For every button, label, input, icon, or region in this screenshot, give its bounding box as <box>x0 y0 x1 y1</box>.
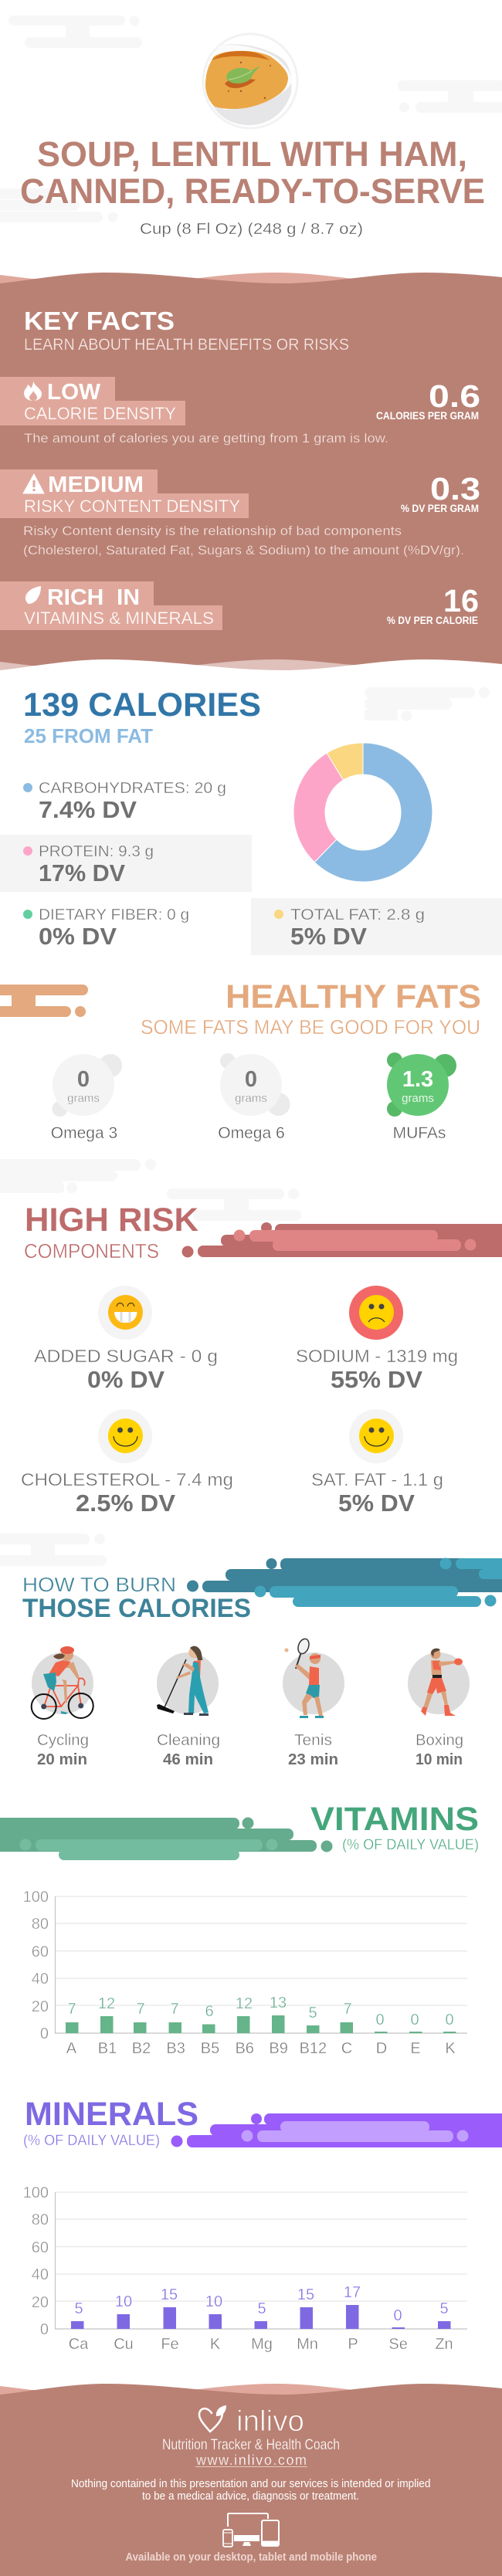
legend: total fat: 5% DV <box>290 923 367 950</box>
bar chart: vitamins <box>23 1889 467 2057</box>
component: saturated fat: 5% DV <box>338 1490 415 1517</box>
legend: protein: PROTEIN: 9.3 g <box>39 843 154 860</box>
title <box>20 134 485 211</box>
tag: low calorie density: LOW <box>47 380 101 405</box>
bar chart: vitamins: B2 <box>132 2040 151 2057</box>
legend: protein: 17% DV <box>39 859 125 886</box>
bar chart: vitamins: 13 <box>270 1995 287 2012</box>
legend: total fat: TOTAL FAT: 2.8 g <box>290 907 425 924</box>
tag: low calorie density <box>0 377 185 425</box>
bar chart: minerals: P <box>348 2336 358 2353</box>
legend: carbohydrates <box>23 780 226 823</box>
heading: vitamins: VITAMINS <box>310 1801 479 1838</box>
bar chart: vitamins: 0 <box>40 2025 49 2042</box>
bar chart: vitamins: 7 <box>136 2001 145 2018</box>
decoration: teal cloud <box>187 1558 502 1607</box>
stat: omega 6: Omega 6 <box>218 1124 285 1142</box>
panel: key facts <box>0 273 502 683</box>
logo: inlivo heart: inlivo <box>236 2405 304 2438</box>
component: sodium: SODIUM - 1319 mg <box>296 1346 458 1366</box>
bar chart: minerals: 40 <box>32 2266 49 2283</box>
food photo: bowl of lentil soup <box>203 34 297 128</box>
bar chart: vitamins: 7 <box>170 2001 179 2018</box>
heading: healthy fats: HEALTHY FATS <box>226 978 481 1015</box>
bar chart: vitamins: 80 <box>32 1916 49 1933</box>
label: cleaning <box>157 1732 220 1768</box>
stat: dv per calorie <box>387 583 479 626</box>
bar chart: vitamins: B9 <box>269 2040 288 2057</box>
bar chart: minerals: 15 <box>161 2286 178 2303</box>
component: sodium: 55% DV <box>331 1366 422 1393</box>
bar chart: minerals: K <box>210 2336 221 2353</box>
disclaimer: to be a medical advice, diagnosis or treatment. <box>142 2490 359 2503</box>
bar chart: minerals: 0 <box>40 2321 49 2338</box>
legend: carbohydrates: 7.4% DV <box>39 796 137 823</box>
label: cleaning: 46 min <box>163 1751 213 1768</box>
panel: minerals <box>23 2096 502 2353</box>
bar chart: minerals: Cu <box>114 2336 134 2353</box>
bar chart: vitamins: 60 <box>32 1944 49 1961</box>
panel: how to burn those calories <box>22 1558 502 1768</box>
label: tennis: Tenis <box>294 1732 332 1749</box>
decoration: tan cloud <box>0 985 88 1017</box>
bar chart: minerals: 15 <box>297 2286 314 2303</box>
bar chart: minerals: 17 <box>344 2284 361 2301</box>
component: cholesterol: CHOLESTEROL - 7.4 mg <box>21 1469 233 1490</box>
bar chart: minerals <box>23 2185 467 2353</box>
bar chart: minerals: 100 <box>23 2185 49 2201</box>
bar chart: minerals: Zn <box>435 2336 453 2353</box>
activity: cycling <box>32 1646 93 1719</box>
component: cholesterol <box>21 1409 233 1517</box>
text: calorie explanation: The amount of calories you are getting from 1 gram is low. <box>24 432 388 446</box>
bar chart: minerals: Fe <box>161 2336 179 2353</box>
label: cycling: Cycling <box>37 1732 89 1749</box>
component: cholesterol: 2.5% DV <box>76 1490 175 1517</box>
bar chart: vitamins: 6 <box>205 2003 214 2020</box>
bar chart: vitamins: B6 <box>235 2040 254 2057</box>
subheading: daily value: (% OF DAILY VALUE) <box>23 2133 160 2149</box>
panel: high risk components <box>21 1202 502 1517</box>
bar chart: minerals: 5 <box>257 2300 266 2317</box>
bar chart: minerals: Mg <box>251 2336 273 2353</box>
bar chart: minerals: 60 <box>32 2239 49 2256</box>
bar chart: vitamins: K <box>445 2040 456 2057</box>
bar chart: minerals: 0 <box>393 2307 402 2324</box>
text: risky density explanation: Risky Content density is the relationship of bad components <box>23 524 402 538</box>
bar chart: vitamins: 12 <box>236 1995 253 2012</box>
bar chart: minerals: Se <box>388 2336 408 2353</box>
bar chart: vitamins: 0 <box>445 2012 454 2029</box>
legend: dietary fiber: 0% DV <box>39 923 117 950</box>
bar chart: vitamins: 40 <box>32 1971 49 1988</box>
stat: risky density <box>401 471 480 514</box>
tag: medium risky content density: RISKY CONTENT DENSITY <box>24 497 240 516</box>
title: CANNED, READY-TO-SERVE <box>20 171 485 211</box>
decoration: purple cloud <box>171 2113 502 2147</box>
heading: high risk: HIGH RISK <box>25 1202 198 1239</box>
stat: risky density: % DV PER GRAM <box>401 503 479 514</box>
label: cycling <box>37 1732 89 1768</box>
bar chart: vitamins: 7 <box>67 2001 76 2018</box>
bar chart: minerals: Mn <box>297 2336 318 2353</box>
bar chart: vitamins: 7 <box>343 2001 352 2018</box>
donut chart <box>293 743 432 882</box>
stat: mufas: 1.3 <box>402 1067 433 1092</box>
stat: omega 6: grams <box>235 1092 267 1105</box>
icon: devices <box>223 2513 279 2547</box>
activity: boxing <box>408 1649 470 1716</box>
stat: omega 6: 0 <box>245 1067 257 1092</box>
label: tennis: 23 min <box>288 1751 338 1768</box>
label: tennis <box>288 1732 338 1768</box>
bar chart: vitamins: D <box>376 2040 387 2057</box>
bar chart: vitamins: A <box>66 2040 77 2057</box>
stat: mufas: grams <box>402 1092 434 1105</box>
subheading: LEARN ABOUT HEALTH BENEFITS OR RISKS <box>24 336 349 354</box>
heading: minerals: MINERALS <box>25 2096 198 2133</box>
stat: dv per calorie: 16 <box>443 583 479 619</box>
stat: omega 3 <box>51 1054 122 1142</box>
tag: low calorie density: CALORIE DENSITY <box>24 404 176 423</box>
legend: dietary fiber: DIETARY FIBER: 0 g <box>39 907 189 924</box>
bar chart: vitamins: 0 <box>375 2012 385 2029</box>
stat: calorie density: CALORIES PER GRAM <box>376 410 479 422</box>
bar chart: vitamins: 12 <box>98 1995 115 2012</box>
tag: rich in vitamins and minerals: RICH IN <box>47 585 140 610</box>
serving size: Cup (8 Fl Oz) (248 g / 8.7 oz) <box>140 221 363 238</box>
activity: tennis <box>283 1637 344 1718</box>
logo: inlivo heart <box>199 2405 304 2438</box>
disclaimer: Nothing contained in this presentation and our services is intended or implied <box>71 2477 431 2490</box>
component: added sugar: ADDED SUGAR - 0 g <box>34 1346 218 1366</box>
component: sodium <box>296 1286 458 1393</box>
stat: risky density: 0.3 <box>430 471 480 507</box>
bar chart: minerals: 20 <box>32 2294 49 2311</box>
heading: key facts: KEY FACTS <box>24 307 175 335</box>
stat: dv per calorie: % DV PER CALORIE <box>387 615 478 626</box>
subheading: daily value: (% OF DAILY VALUE) <box>342 1837 479 1853</box>
label: cleaning: Cleaning <box>157 1732 220 1749</box>
bar chart: vitamins: B3 <box>166 2040 185 2057</box>
bar chart: vitamins: 0 <box>410 2012 419 2029</box>
subheading: from fat: 25 FROM FAT <box>24 724 153 747</box>
bar chart: minerals: 5 <box>439 2300 449 2317</box>
component: added sugar <box>34 1286 218 1393</box>
bar chart: vitamins: B12 <box>300 2040 327 2057</box>
bar chart: vitamins: 20 <box>32 1998 49 2015</box>
legend: protein <box>23 843 154 886</box>
component: saturated fat: SAT. FAT - 1.1 g <box>311 1469 443 1490</box>
bar chart: vitamins: 100 <box>23 1889 49 1906</box>
label: cycling: 20 min <box>37 1751 87 1768</box>
legend: total fat <box>274 907 425 950</box>
disclaimer <box>71 2477 431 2503</box>
stat: omega 3: grams <box>67 1092 100 1105</box>
bar chart: vitamins: B1 <box>98 2040 117 2057</box>
bar chart: vitamins: 5 <box>308 2005 317 2022</box>
title: SOUP, LENTIL WITH HAM, <box>37 134 467 174</box>
bar chart: minerals: 80 <box>32 2212 49 2229</box>
legend: dietary fiber <box>23 907 189 950</box>
panel: calories <box>0 686 502 955</box>
decoration: green cloud <box>0 1818 332 1860</box>
bar chart: vitamins: B5 <box>201 2040 219 2057</box>
stat: omega 3: Omega 3 <box>51 1124 117 1142</box>
panel: vitamins <box>0 1801 479 2057</box>
component: added sugar: 0% DV <box>87 1366 165 1393</box>
tag: rich in vitamins and minerals: VITAMINS & MINERALS <box>24 608 214 628</box>
availability note: Available on your desktop, tablet and mobile phone <box>125 2551 377 2564</box>
label: boxing: 10 min <box>416 1751 463 1768</box>
bar chart: minerals: 10 <box>115 2293 132 2310</box>
heading: calories: 139 CALORIES <box>23 686 261 724</box>
stat: mufas <box>387 1052 456 1142</box>
decoration: red cloud <box>182 1222 502 1257</box>
stat: mufas: MUFAs <box>393 1124 446 1142</box>
label: boxing <box>416 1732 463 1768</box>
stat: omega 6 <box>218 1053 290 1142</box>
panel: healthy fats <box>0 978 481 1142</box>
legend: carbohydrates: CARBOHYDRATES: 20 g <box>39 780 226 797</box>
label: boxing: Boxing <box>416 1732 463 1749</box>
subheading: fats: SOME FATS MAY BE GOOD FOR YOU <box>141 1015 480 1039</box>
stat: calorie density <box>376 378 480 422</box>
component: saturated fat <box>311 1409 443 1517</box>
bar chart: vitamins: E <box>410 2040 421 2057</box>
heading: those calories: THOSE CALORIES <box>22 1594 251 1623</box>
bar chart: vitamins: C <box>341 2040 352 2057</box>
tag: rich in vitamins and minerals <box>0 581 222 630</box>
panel: footer <box>0 2384 502 2576</box>
tag: medium risky content density <box>0 469 249 518</box>
activity: cleaning <box>157 1646 219 1716</box>
heading: how to burn: HOW TO BURN <box>22 1573 176 1596</box>
bar chart: minerals: Ca <box>69 2336 89 2353</box>
bar chart: minerals: 5 <box>74 2300 83 2317</box>
bar chart: minerals: 10 <box>205 2293 222 2310</box>
text: risky density explanation <box>23 524 464 558</box>
text: risky density explanation: (Cholesterol, Saturated Fat, Sugars & Sodium) to the amount (%DV/gr). <box>23 544 464 558</box>
tagline: Nutrition Tracker & Health Coach <box>162 2437 340 2453</box>
stat: calorie density: 0.6 <box>429 378 480 414</box>
stat: omega 3: 0 <box>77 1067 90 1092</box>
tag: medium risky content density: MEDIUM <box>48 473 144 497</box>
subheading: components: COMPONENTS <box>24 1239 159 1263</box>
website link: www.inlivo.com <box>195 2452 307 2468</box>
